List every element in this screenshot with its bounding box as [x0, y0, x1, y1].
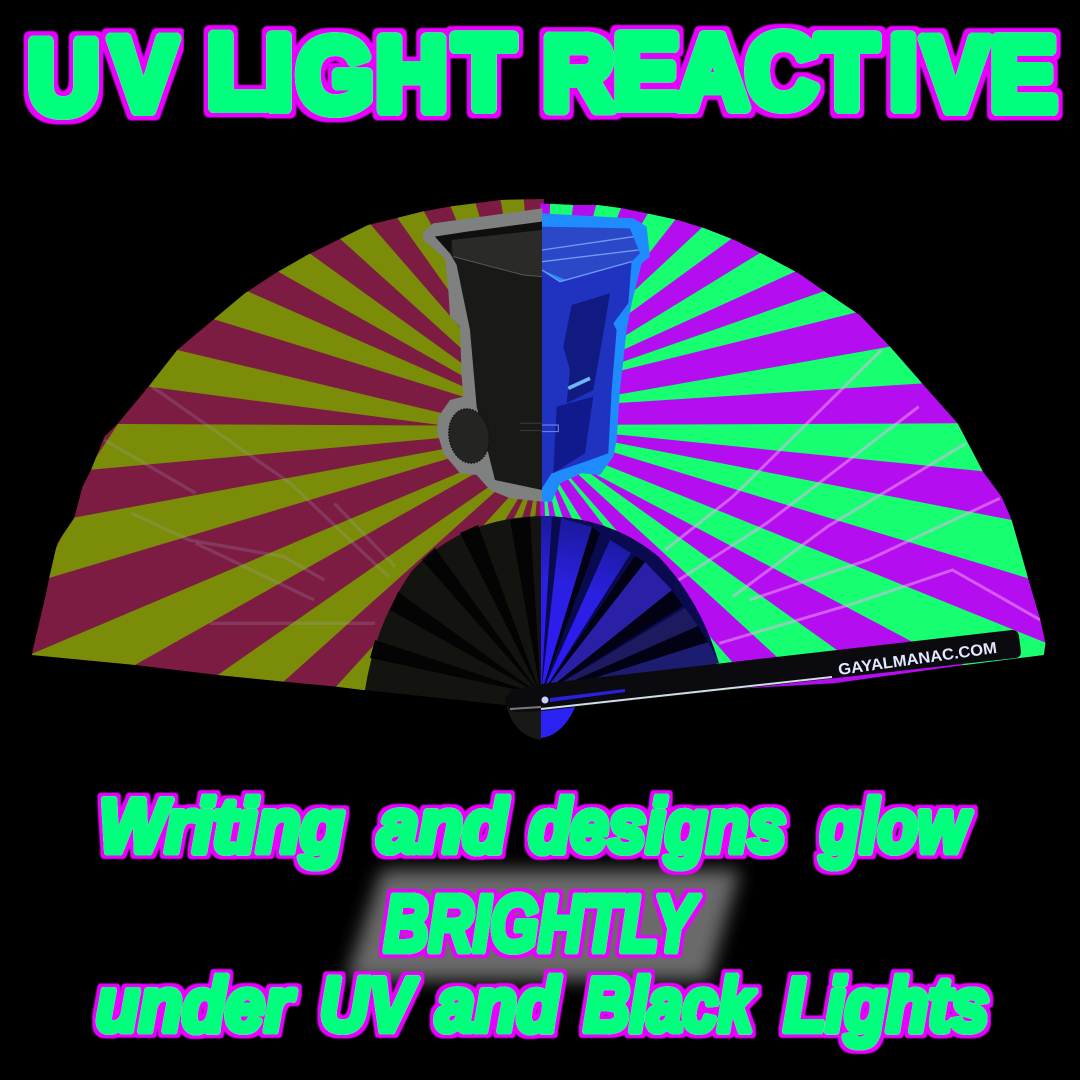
caption — [96, 784, 989, 1048]
panel: UV-lit right fan half — [530, 190, 1057, 703]
caption: glow — [819, 784, 972, 869]
caption: Lights — [784, 963, 989, 1048]
left bin body — [435, 222, 542, 490]
trash bin sticker — [423, 208, 650, 502]
left bin sticker border — [423, 208, 542, 502]
panel: unlit black ribs — [365, 516, 542, 705]
title: REACTIVE — [543, 14, 1056, 133]
caption: Black — [584, 963, 756, 1048]
icon: bin wheel — [445, 406, 493, 466]
logo text: GAYALMANAC.COM — [837, 640, 998, 679]
title: UV — [28, 17, 176, 136]
fabric creases — [665, 350, 1040, 643]
title — [28, 14, 1056, 136]
caption: designs — [529, 784, 786, 869]
caption: Writing — [99, 784, 344, 869]
caption: under — [96, 963, 296, 1048]
caption: and — [378, 784, 508, 869]
right bin body — [542, 227, 640, 488]
glow behind BRIGHTLY — [346, 870, 740, 980]
right bin sticker border — [542, 213, 650, 502]
caption: BRIGHTLY — [384, 879, 700, 968]
title: LIGHT — [207, 14, 514, 134]
fan — [20, 190, 1057, 740]
panel: unlit left fan half — [20, 190, 547, 703]
caption: UV — [320, 963, 418, 1048]
pivot lower ribs — [505, 695, 578, 740]
fabric creases — [104, 387, 395, 623]
caption: and — [436, 963, 560, 1048]
handle with logo text — [505, 630, 1021, 712]
panel: UV-lit blue ribs — [541, 516, 719, 710]
